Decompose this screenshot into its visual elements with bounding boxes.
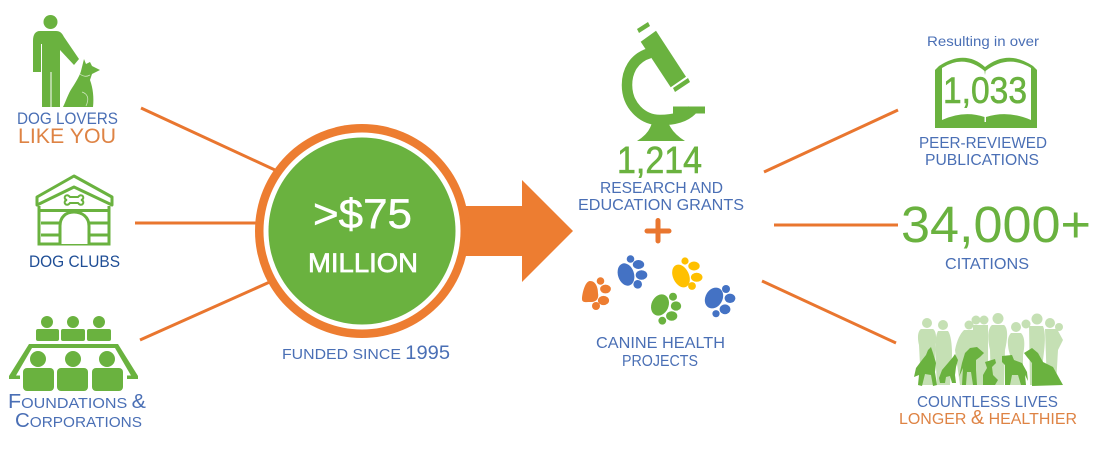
icon: second blue paw <box>701 284 735 317</box>
label: education grants: EDUCATION GRANTS <box>578 197 744 214</box>
icon: dog silhouettes <box>914 347 1063 386</box>
icon: plus <box>647 220 669 241</box>
panel: dog clubs <box>29 176 120 271</box>
panel: citations <box>901 196 1091 273</box>
publications count: 1,033 <box>943 70 1027 111</box>
label: funded since 1995: FUNDED SINCE 1995 <box>282 343 450 364</box>
connector lines: sources to fund <box>135 108 275 340</box>
citations count: 34,000+ <box>901 196 1091 253</box>
label: canine health: CANINE HEALTH <box>596 335 725 352</box>
icon: boardroom <box>9 316 138 391</box>
label: corporations: CORPORATIONS <box>15 410 142 432</box>
panel: dog lovers <box>17 15 118 148</box>
amount: >$75 <box>313 190 412 237</box>
icon: green paw <box>648 291 681 325</box>
label: like you: LIKE YOU <box>18 125 116 148</box>
icon: person with dog <box>33 15 100 107</box>
label: dog clubs: DOG CLUBS <box>29 253 120 271</box>
label: resulting in over: Resulting in over <box>927 33 1039 49</box>
icon: open book <box>935 58 1037 128</box>
label: peer-reviewed: PEER-REVIEWED <box>919 135 1047 152</box>
million: MILLION <box>308 248 418 278</box>
icon: yellow paw <box>669 257 702 290</box>
label: dog lovers: DOG LOVERS <box>17 110 118 128</box>
icon: dog house <box>37 176 112 244</box>
label: foundations: FOUNDATIONS & <box>8 391 147 413</box>
panel: publications <box>919 33 1047 169</box>
icon: people silhouettes <box>918 313 1063 385</box>
panel: foundations and corporations <box>8 316 147 432</box>
panel: canine health projects <box>582 255 735 370</box>
label: countless lives: COUNTLESS LIVES <box>917 394 1058 411</box>
panel: countless lives <box>899 313 1077 429</box>
label: projects: PROJECTS <box>622 353 698 370</box>
panel: funding circle <box>255 124 469 338</box>
label: publications: PUBLICATIONS <box>925 152 1039 169</box>
arrow: to grants and projects <box>460 180 573 282</box>
label: research and: RESEARCH AND <box>600 180 723 197</box>
icon: orange paw <box>582 277 611 310</box>
icon: microscope <box>627 22 705 141</box>
label: longer and healthier: LONGER & HEALTHIER <box>899 407 1077 429</box>
connector lines: projects to outcomes <box>762 110 898 343</box>
label: citations: CITATIONS <box>945 256 1029 273</box>
grants count: 1,214 <box>617 140 702 182</box>
icon: blue paw <box>615 255 647 289</box>
panel: research grants <box>578 22 744 214</box>
